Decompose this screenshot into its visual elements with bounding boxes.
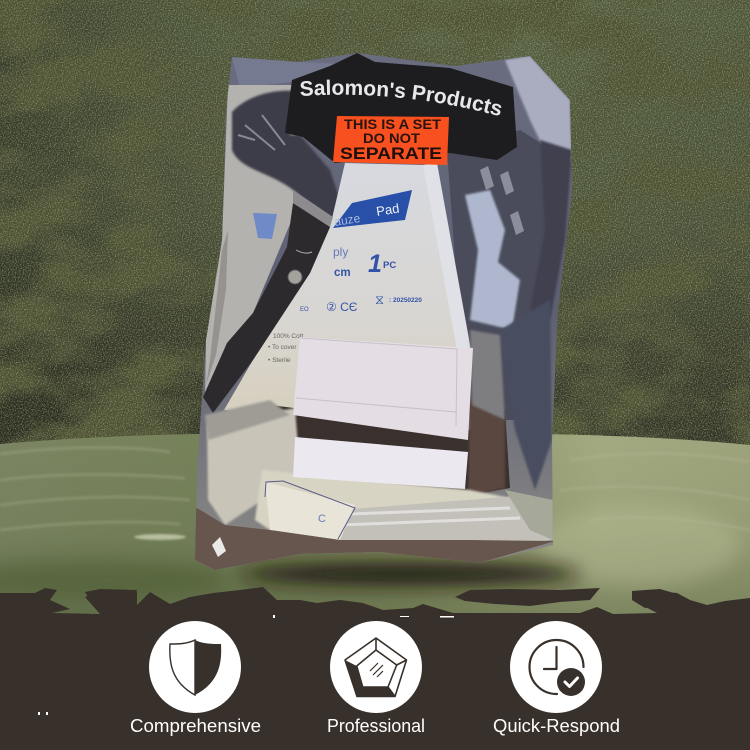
left translucent panel	[205, 85, 300, 400]
bag body	[195, 53, 572, 570]
gauze pad packet	[224, 163, 462, 420]
label: comprehensive: Comprehensive	[130, 716, 261, 736]
blue band with pad label: Pad	[375, 201, 400, 219]
product: sealed plastic bag	[195, 53, 572, 570]
brand text	[300, 95, 510, 119]
black header band	[285, 53, 517, 163]
product: sealed plastic bag: Salomon's Products	[300, 80, 502, 116]
icon: clock with check	[510, 621, 602, 713]
packet lower text	[268, 333, 304, 364]
packet print: cm	[334, 267, 351, 279]
orange warning sticker: DO NOT	[363, 131, 421, 146]
background: green table top	[0, 434, 750, 625]
black strap with rivet	[203, 203, 330, 413]
feature: comprehensive	[130, 621, 261, 736]
packet print: ⧖	[375, 292, 384, 307]
brown item behind labels	[270, 405, 510, 495]
feature: quick-respond	[493, 621, 620, 736]
zip seal strip	[232, 57, 334, 85]
icon: faceted pentagon	[330, 621, 422, 713]
orange warning sticker: THIS IS A SET	[344, 117, 442, 132]
packet print	[300, 245, 422, 314]
white paint specks	[38, 615, 454, 715]
orange warning sticker: SEPARATE	[340, 144, 442, 163]
small printed packet	[265, 482, 355, 540]
orange warning sticker	[333, 116, 449, 165]
packet print: ② CЄ	[326, 300, 358, 314]
dark scissor handle under plastic	[232, 91, 345, 222]
white blank label: upper	[293, 337, 473, 440]
right lower plastic	[500, 300, 552, 490]
feature: professional	[327, 621, 425, 736]
packet print: ply	[333, 245, 348, 259]
right plastic highlights	[505, 56, 572, 172]
white blank label: lower	[293, 437, 468, 489]
bag contents	[192, 56, 572, 570]
torn band dark islands	[85, 588, 677, 608]
bag contents: C	[318, 513, 326, 525]
clear zip end	[340, 495, 553, 541]
white wrap lump	[207, 408, 300, 525]
packet lower text: 100% Cott	[273, 333, 304, 340]
torn dark footer band	[0, 587, 750, 750]
right dark folded tool	[447, 130, 552, 420]
packet print: PC	[383, 260, 396, 271]
bottom corner highlight	[212, 537, 226, 557]
background: olive velvet wall	[0, 0, 750, 450]
packet lower text: • To cover	[268, 344, 297, 351]
label: quick-respond: Quick-Respond	[493, 716, 620, 736]
packet print: 1	[368, 250, 382, 278]
blue band with pad label	[253, 190, 412, 239]
brown bottom	[192, 505, 555, 570]
packet lower text: • Sterile	[268, 357, 291, 364]
packet print: EO	[300, 307, 309, 313]
packet print: : 20250220	[389, 297, 422, 304]
cream packet below labels	[255, 470, 520, 530]
blue band with pad label: auze	[333, 211, 361, 229]
icon: shield	[149, 621, 241, 713]
label: professional: Professional	[327, 716, 425, 736]
